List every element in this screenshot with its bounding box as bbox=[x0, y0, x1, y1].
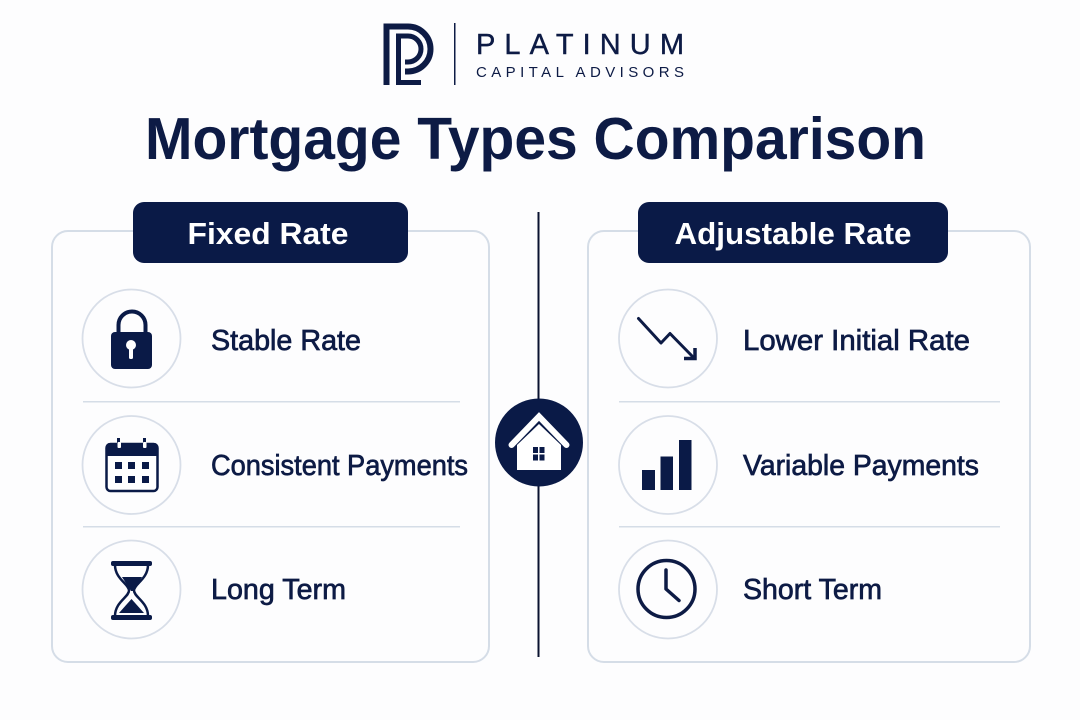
label: long term: Long Term bbox=[211, 574, 346, 606]
heading: adjustable rate: Adjustable Rate bbox=[674, 216, 912, 251]
logo bbox=[386, 23, 684, 85]
icon: calendar bbox=[82, 416, 180, 514]
label: stable rate: Stable Rate bbox=[211, 325, 361, 357]
icon: clock bbox=[619, 540, 717, 638]
row dividers bbox=[83, 401, 460, 528]
logo divider bbox=[454, 23, 456, 85]
icon: hourglass bbox=[82, 540, 180, 638]
icon: house badge bbox=[495, 398, 583, 486]
heading: fixed rate: Fixed Rate bbox=[188, 216, 348, 251]
panel outline bbox=[52, 231, 489, 662]
icon: bar chart bbox=[619, 416, 717, 514]
label: lower initial rate: Lower Initial Rate bbox=[743, 325, 970, 357]
row dividers bbox=[619, 401, 1000, 528]
panel outline bbox=[588, 231, 1030, 662]
heading: fixed rate bbox=[133, 202, 408, 263]
panel: adjustable rate bbox=[588, 202, 1030, 662]
label: short term: Short Term bbox=[743, 574, 882, 606]
logo wordmark: PLATINUM bbox=[476, 29, 684, 61]
icon: padlock bbox=[82, 290, 180, 388]
label: variable payments: Variable Payments bbox=[743, 450, 979, 482]
title: Mortgage Types Comparison bbox=[145, 106, 926, 172]
label: consistent payments: Consistent Payments bbox=[211, 450, 468, 482]
panel: fixed rate bbox=[52, 202, 489, 662]
logo mark bbox=[386, 26, 430, 85]
logo tagline: CAPITAL ADVISORS bbox=[476, 64, 684, 81]
centre divider line bbox=[538, 212, 540, 657]
heading: adjustable rate bbox=[638, 202, 948, 263]
icon: falling arrow bbox=[619, 290, 717, 388]
